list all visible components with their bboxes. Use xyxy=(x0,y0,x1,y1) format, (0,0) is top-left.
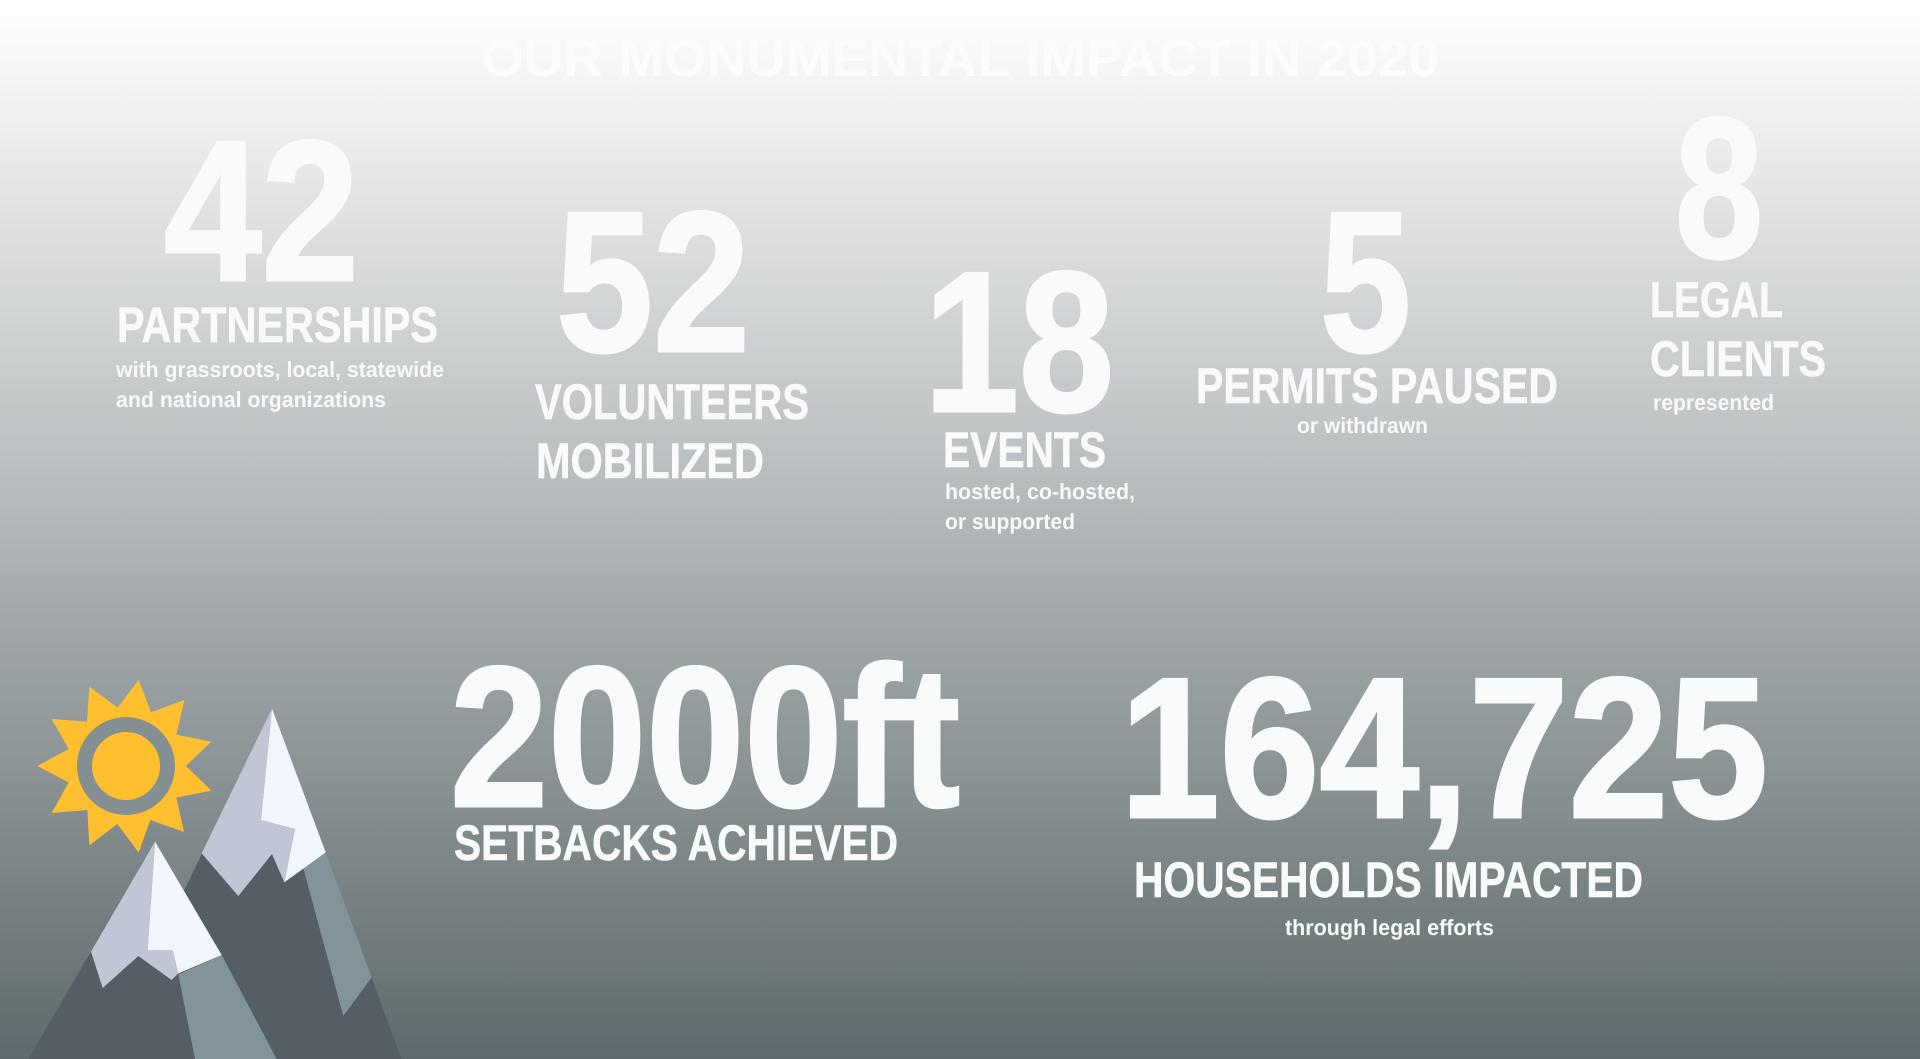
description: partnerships line 2: and national organizations xyxy=(116,387,386,412)
stat: 52 volunteers xyxy=(535,171,809,489)
description: or withdrawn: or withdrawn xyxy=(1297,413,1428,438)
number: 52: 52 xyxy=(556,171,750,394)
label: permits paused: PERMITS PAUSED xyxy=(1196,358,1558,414)
icon: sun xyxy=(37,680,211,852)
back mountain xyxy=(167,708,402,1059)
label: clients: CLIENTS xyxy=(1650,331,1826,387)
number: 2000ft: 2000ft xyxy=(450,626,960,849)
number: 8: 8 xyxy=(1675,77,1763,300)
label: volunteers: VOLUNTEERS xyxy=(535,374,809,430)
stat: 164,725 households xyxy=(1120,637,1768,940)
number: 5: 5 xyxy=(1320,171,1411,394)
label: partnerships: PARTNERSHIPS xyxy=(117,297,438,353)
stat: 42 partnerships xyxy=(115,100,444,412)
description: partnerships line 1: with grassroots, local, statewide xyxy=(115,357,444,382)
label: households impacted: HOUSEHOLDS IMPACTED xyxy=(1134,852,1643,908)
stat: 2000ft setbacks xyxy=(450,626,960,871)
number: 164,725: 164,725 xyxy=(1120,637,1768,860)
description: events line 2: or supported xyxy=(945,509,1075,534)
description: events line 1: hosted, co-hosted, xyxy=(945,479,1135,504)
label: mobilized: MOBILIZED xyxy=(536,433,764,489)
description: through legal efforts: through legal efforts xyxy=(1285,915,1494,940)
front mountain xyxy=(28,842,277,1059)
number: 42: 42 xyxy=(164,100,359,323)
stat: 8 legal clients xyxy=(1650,77,1826,415)
label: setbacks achieved: SETBACKS ACHIEVED xyxy=(454,815,898,871)
stat: 18 events xyxy=(924,231,1135,534)
label: events: EVENTS xyxy=(943,422,1106,478)
description: represented: represented xyxy=(1653,390,1774,415)
title: OUR MONUMENTAL IMPACT IN 2020 xyxy=(481,30,1439,88)
number: 18: 18 xyxy=(924,231,1114,454)
label: legal: LEGAL xyxy=(1650,272,1783,328)
stat: 5 permits paused xyxy=(1196,171,1558,438)
icon: mountains xyxy=(28,708,402,1059)
